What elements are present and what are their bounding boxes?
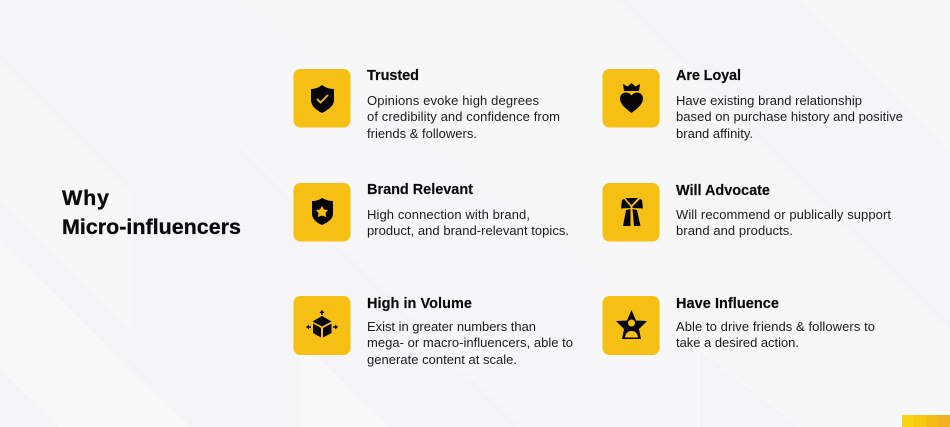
icon: star with person: [602, 296, 660, 355]
title: High in Volume: [367, 296, 472, 312]
title: Will Advocate: [676, 183, 770, 199]
panel: Trusted: [294, 68, 560, 141]
panel: Are Loyal: [602, 68, 903, 141]
heading: Why Micro-influencers: Micro-influencers: [62, 215, 241, 239]
description: Will recommend or publically support: [676, 207, 891, 222]
description: Able to drive friends & followers to: [676, 319, 875, 334]
description: of credibility and confidence from: [367, 109, 560, 124]
description: generate content at scale.: [367, 352, 517, 367]
panel: Will Advocate: [602, 183, 891, 242]
description: [367, 93, 560, 141]
description: High connection with brand,: [367, 207, 530, 222]
description: based on purchase history and positive: [676, 109, 903, 124]
description: [676, 319, 875, 350]
title: Trusted: [367, 68, 419, 84]
corner colour strip: [902, 415, 950, 427]
heading: Why Micro-influencers: [62, 186, 241, 239]
description: [676, 207, 891, 238]
description: product, and brand-relevant topics.: [367, 223, 569, 238]
panel: Brand Relevant: [294, 182, 569, 242]
description: brand and products.: [676, 223, 793, 238]
panel: Have Influence: [602, 296, 875, 355]
icon: shield with check: [294, 69, 350, 128]
heading: Why Micro-influencers: Why: [62, 186, 109, 210]
title: Brand Relevant: [367, 182, 473, 198]
description: Opinions evoke high degrees: [367, 93, 540, 108]
description: [676, 93, 903, 141]
icon: shield with star: [294, 183, 350, 242]
description: Have existing brand relationship: [676, 93, 862, 108]
title: Are Loyal: [676, 68, 741, 84]
description: [367, 319, 573, 367]
panel: High in Volume: [294, 296, 573, 367]
description: Exist in greater numbers than: [367, 319, 536, 334]
title: Have Influence: [676, 296, 779, 312]
icon: box with arrows: [294, 296, 350, 355]
icon: crowned heart: [602, 69, 660, 128]
icon: advocate gown: [602, 183, 660, 242]
description: friends & followers.: [367, 126, 477, 141]
description: mega- or macro-influencers, able to: [367, 335, 573, 350]
description: [367, 207, 569, 238]
description: brand affinity.: [676, 126, 753, 141]
description: take a desired action.: [676, 335, 799, 350]
